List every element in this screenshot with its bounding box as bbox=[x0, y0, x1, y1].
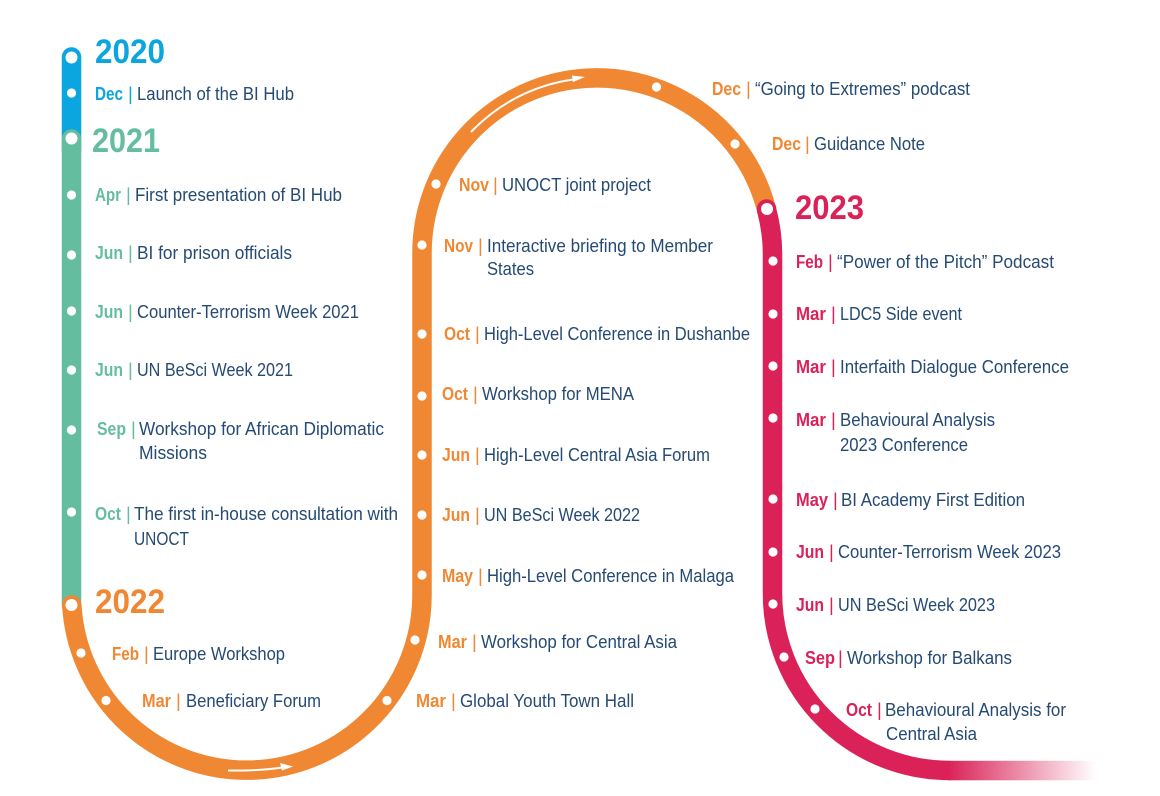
track: fading pink tail bbox=[948, 761, 1096, 780]
event: Sep Workshop for Balkans: Workshop for Balkans bbox=[847, 647, 1012, 668]
event: Jun UN BeSci Week 2023: UN BeSci Week 2023 bbox=[838, 594, 995, 615]
track: 2021 green segment bbox=[62, 139, 81, 605]
event: Jun UN BeSci Week 2021: | bbox=[128, 359, 133, 380]
event: Jun High-Level Central Asia Forum: | bbox=[475, 444, 480, 465]
event: Feb Europe Workshop: | bbox=[144, 643, 149, 664]
event: Jun UN BeSci Week 2021: Jun bbox=[95, 359, 123, 380]
event: Nov Interactive briefing to Member States: Interactive briefing to Member bbox=[487, 235, 713, 256]
event: Mar Global Youth Town Hall: | bbox=[451, 690, 456, 711]
event: Oct Behavioural Analysis for Central Asia: | bbox=[877, 699, 882, 720]
event: Sep Workshop for African Diplomatic Missions: Workshop for African Diplomatic bbox=[139, 418, 384, 439]
event: Sep Workshop for Balkans: Sep bbox=[805, 647, 835, 668]
event: Jun Counter-Terrorism Week 2021: | bbox=[128, 301, 133, 322]
event: Nov UNOCT joint project: UNOCT joint project bbox=[502, 174, 651, 195]
event: May BI Academy First Edition: BI Academy First Edition bbox=[841, 489, 1025, 510]
event: Oct The first in-house consultation with UNOCT: | bbox=[126, 503, 131, 524]
event: Mar Behavioural Analysis 2023 Conference: | bbox=[831, 409, 836, 430]
event: Oct The first in-house consultation with UNOCT: UNOCT bbox=[134, 528, 189, 549]
event: May High-Level Conference in Malaga: | bbox=[478, 565, 483, 586]
event: Nov UNOCT joint project: | bbox=[493, 174, 498, 195]
event: Dec Guidance Note: | bbox=[805, 133, 810, 154]
event: Apr First presentation of BI Hub: Apr bbox=[95, 184, 121, 205]
event: Oct The first in-house consultation with UNOCT: The first in-house consultation with bbox=[134, 503, 398, 524]
event: Jun Counter-Terrorism Week 2023: | bbox=[829, 541, 834, 562]
event: Jun High-Level Central Asia Forum: High-Level Central Asia Forum bbox=[484, 444, 710, 465]
track: 2023 pink segment bbox=[757, 199, 950, 770]
heading: 2020: 2020 bbox=[95, 33, 165, 71]
event: Oct High-Level Conference in Dushanbe: High-Level Conference in Dushanbe bbox=[484, 323, 750, 344]
event: Oct Behavioural Analysis for Central Asia: Central Asia bbox=[886, 723, 978, 744]
event: Jun BI for prison officials: | bbox=[128, 242, 133, 263]
event: Jun UN BeSci Week 2022: UN BeSci Week 2022 bbox=[484, 504, 640, 525]
event: Mar Beneficiary Forum: Mar bbox=[142, 690, 171, 711]
event: Jun Counter-Terrorism Week 2023: Counter-Terrorism Week 2023 bbox=[838, 541, 1061, 562]
event: Oct High-Level Conference in Dushanbe: | bbox=[475, 323, 480, 344]
event: Jun Counter-Terrorism Week 2021: Jun bbox=[95, 301, 123, 322]
heading: 2021: 2021 bbox=[92, 122, 160, 160]
event: Jun UN BeSci Week 2022: Jun bbox=[442, 504, 470, 525]
event: Jun UN BeSci Week 2022: | bbox=[475, 504, 480, 525]
event: Oct The first in-house consultation with UNOCT bbox=[95, 503, 398, 549]
station dots bbox=[66, 52, 820, 714]
event: Feb Power of the Pitch Podcast: | bbox=[828, 251, 833, 272]
event: Dec Launch of the BI Hub: Dec bbox=[95, 83, 123, 104]
event: Mar Workshop for Central Asia: Workshop for Central Asia bbox=[481, 631, 678, 652]
event: Oct High-Level Conference in Dushanbe: Oct bbox=[444, 323, 470, 344]
arrow: top curve direction bbox=[471, 76, 585, 132]
event: Nov Interactive briefing to Member States: States bbox=[487, 258, 534, 279]
event: Oct The first in-house consultation with UNOCT: Oct bbox=[95, 503, 121, 524]
event: Dec Guidance Note: Dec bbox=[772, 133, 801, 154]
event: Feb Power of the Pitch Podcast: “Power of the Pitch” Podcast bbox=[837, 251, 1054, 272]
event: Sep Workshop for African Diplomatic Missions: | bbox=[131, 418, 136, 439]
event: Apr First presentation of BI Hub: First presentation of BI Hub bbox=[135, 184, 342, 205]
event: Mar Beneficiary Forum: | bbox=[176, 690, 181, 711]
event: Sep Workshop for African Diplomatic Missions bbox=[97, 418, 384, 463]
arrow: bottom curve direction bbox=[228, 763, 293, 771]
event: Oct Workshop for MENA: Oct bbox=[442, 383, 468, 404]
event: Oct Workshop for MENA: Workshop for MENA bbox=[482, 383, 635, 404]
event: May High-Level Conference in Malaga: May bbox=[442, 565, 474, 586]
event: Mar LDC5 Side event: | bbox=[831, 303, 836, 324]
event: Mar Beneficiary Forum bbox=[142, 690, 321, 711]
event: Dec Going to Extremes podcast: “Going to Extremes” podcast bbox=[755, 78, 970, 99]
event: Dec Launch of the BI Hub: | bbox=[128, 83, 133, 104]
event: Feb Power of the Pitch Podcast: Feb bbox=[796, 251, 823, 272]
event: Jun UN BeSci Week 2023: | bbox=[829, 594, 834, 615]
event: Sep Workshop for Balkans: | bbox=[838, 647, 843, 668]
event: Jun Counter-Terrorism Week 2021: Counter-Terrorism Week 2021 bbox=[137, 301, 359, 322]
event: Jun BI for prison officials: Jun bbox=[95, 242, 123, 263]
event: Jun BI for prison officials: BI for prison officials bbox=[137, 242, 292, 263]
event: May BI Academy First Edition: | bbox=[833, 489, 838, 510]
event: Jun Counter-Terrorism Week 2023: Jun bbox=[796, 541, 824, 562]
event: Nov Interactive briefing to Member States: | bbox=[478, 235, 483, 256]
event: Dec Going to Extremes podcast: | bbox=[746, 78, 751, 99]
event: Apr First presentation of BI Hub: | bbox=[126, 184, 131, 205]
event: Dec Guidance Note bbox=[772, 133, 925, 154]
track: 2020 blue segment bbox=[62, 57, 81, 150]
event: Jun UN BeSci Week 2021: UN BeSci Week 2021 bbox=[137, 359, 293, 380]
event: Dec Guidance Note: Guidance Note bbox=[814, 133, 925, 154]
event: Dec Launch of the BI Hub: Launch of the BI Hub bbox=[137, 83, 294, 104]
event: Mar Workshop for Central Asia: | bbox=[472, 631, 477, 652]
event: Nov Interactive briefing to Member States: Nov bbox=[444, 235, 474, 256]
event: Feb Europe Workshop: Europe Workshop bbox=[153, 643, 285, 664]
event: Mar LDC5 Side event: Mar bbox=[796, 303, 826, 324]
event: Mar Behavioural Analysis 2023 Conference: Behavioural Analysis bbox=[840, 409, 995, 430]
heading: 2022: 2022 bbox=[95, 583, 165, 621]
event: Oct Behavioural Analysis for Central Asia bbox=[846, 699, 1066, 744]
event: Oct Workshop for MENA: | bbox=[473, 383, 478, 404]
event: Mar Behavioural Analysis 2023 Conference: 2023 Conference bbox=[840, 434, 968, 455]
event: Nov Interactive briefing to Member States bbox=[444, 235, 713, 279]
event: May BI Academy First Edition: May bbox=[796, 489, 829, 510]
event: Mar Interfaith Dialogue Conference: | bbox=[831, 356, 836, 377]
event: Dec Going to Extremes podcast: Dec bbox=[712, 78, 741, 99]
event: Mar Interfaith Dialogue Conference: Mar bbox=[796, 356, 826, 377]
event: Feb Europe Workshop bbox=[112, 643, 285, 664]
event: Mar Behavioural Analysis 2023 Conference bbox=[796, 409, 995, 455]
event: Mar LDC5 Side event bbox=[796, 303, 962, 324]
event: Mar Interfaith Dialogue Conference: Interfaith Dialogue Conference bbox=[840, 356, 1069, 377]
event: Mar Global Youth Town Hall: Mar bbox=[416, 690, 446, 711]
event: Sep Workshop for African Diplomatic Missions: Sep bbox=[97, 418, 126, 439]
event: Feb Europe Workshop: Feb bbox=[112, 643, 139, 664]
event: Mar Workshop for Central Asia: Mar bbox=[438, 631, 467, 652]
event: Oct Behavioural Analysis for Central Asia: Oct bbox=[846, 699, 872, 720]
event: Mar Behavioural Analysis 2023 Conference: Mar bbox=[796, 409, 826, 430]
event: Mar Global Youth Town Hall: Global Youth Town Hall bbox=[460, 690, 634, 711]
event: Mar Beneficiary Forum: Beneficiary Forum bbox=[186, 690, 321, 711]
event: Nov UNOCT joint project: Nov bbox=[459, 174, 490, 195]
heading: 2023: 2023 bbox=[795, 189, 864, 227]
event: Jun UN BeSci Week 2023: Jun bbox=[796, 594, 824, 615]
event: Mar LDC5 Side event: LDC5 Side event bbox=[840, 303, 962, 324]
event: May High-Level Conference in Malaga: High-Level Conference in Malaga bbox=[487, 565, 735, 586]
event: Sep Workshop for African Diplomatic Missions: Missions bbox=[139, 442, 207, 463]
track: 2022 orange serpentine bbox=[62, 78, 766, 770]
event: Jun High-Level Central Asia Forum: Jun bbox=[442, 444, 470, 465]
event: Oct Behavioural Analysis for Central Asia: Behavioural Analysis for bbox=[885, 699, 1066, 720]
